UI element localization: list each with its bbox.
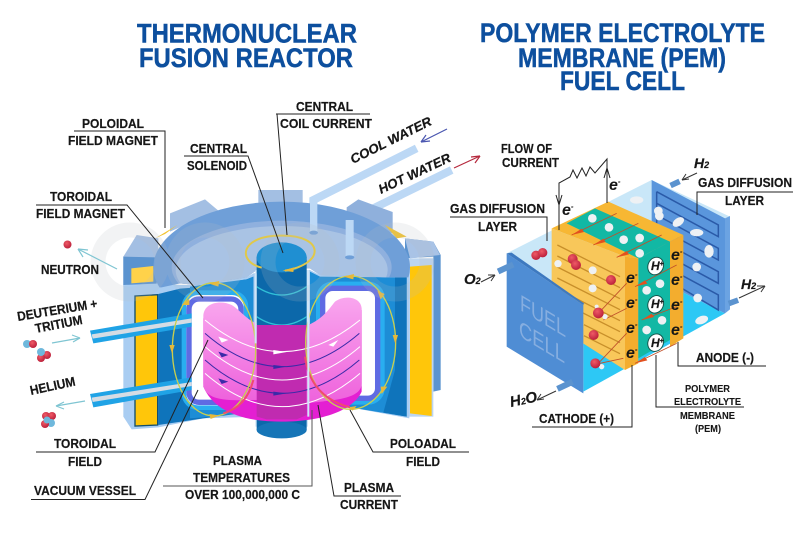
label: toroidal field magnet: TOROIDAL xyxy=(50,189,112,204)
cell side: gold cathode xyxy=(625,257,638,370)
lid ring and top surface xyxy=(153,202,410,288)
text: electrons: e xyxy=(609,177,618,194)
label: deuterium + tritium: TRITIUM xyxy=(34,312,84,336)
text: H+ ions: + xyxy=(660,338,664,345)
arrow: cool water in xyxy=(421,129,447,142)
label: left gas diffusion layer xyxy=(450,201,545,234)
text: H+ ions: H xyxy=(651,297,660,311)
label: hot water: HOT WATER xyxy=(376,150,454,197)
label: poloidal field magnet: FIELD MAGNET xyxy=(68,133,158,148)
right outer block xyxy=(405,238,441,417)
label: central solenoid: CENTRAL xyxy=(190,141,247,156)
label: central solenoid: SOLENOID xyxy=(187,158,247,173)
label: central solenoid xyxy=(187,141,247,173)
text: electrons: - xyxy=(635,270,638,279)
label: anode: ANODE (-) xyxy=(696,350,754,365)
cathode front face xyxy=(552,228,625,370)
back plate: gas diffusion layer xyxy=(652,179,739,313)
title: thermonuclear fusion reactor: THERMONUCLEAR xyxy=(137,18,357,48)
cell side: membrane xyxy=(638,242,670,358)
text: H+ ions: + xyxy=(660,261,664,268)
label: deuterium + tritium xyxy=(16,296,99,336)
label: polymer electrolyte membrane: MEMBRANE xyxy=(680,410,735,422)
text: H+ ions xyxy=(651,259,664,350)
title: PEM fuel cell xyxy=(480,18,765,96)
label: H2 inlet: H2 xyxy=(694,155,709,171)
text: electrons: e xyxy=(626,295,635,312)
label: plasma temperatures xyxy=(185,453,301,502)
title: PEM fuel cell: FUEL CELL xyxy=(560,66,685,96)
label: flow of current: FLOW OF xyxy=(501,141,552,156)
fuel cell diagram xyxy=(497,179,739,393)
label: right gas diffusion layer: LAYER xyxy=(725,193,765,208)
back tabs of outer shell xyxy=(155,190,407,238)
label: polymer electrolyte membrane: (PEM) xyxy=(695,423,721,435)
label: poloadal field xyxy=(390,436,456,469)
port pipes xyxy=(90,313,192,407)
poloidal loop arrowheads xyxy=(169,274,398,419)
top translucent layer xyxy=(507,180,730,305)
label: neutron: NEUTRON xyxy=(41,262,99,277)
watermark rings xyxy=(98,230,617,294)
text: fuel cell plate: FUEL xyxy=(520,290,566,343)
label: toroidal field magnet xyxy=(36,189,125,221)
winding arrowheads xyxy=(218,337,338,396)
leader lines: fuel cell xyxy=(450,192,793,427)
membrane teal top xyxy=(567,208,670,258)
label: plasma current: CURRENT xyxy=(340,497,398,512)
text: electrons: e xyxy=(671,272,680,289)
arrow: H2 outlet xyxy=(739,286,765,298)
vacuum vessel right inner xyxy=(323,288,378,398)
label: helium: HELIUM xyxy=(29,374,77,398)
text: electrons: - xyxy=(635,345,638,354)
title: thermonuclear fusion reactor xyxy=(137,18,357,73)
text: electrons: - xyxy=(635,320,638,329)
poloidal field loops xyxy=(172,276,396,416)
label: plasma temperatures: PLASMA xyxy=(213,453,263,468)
text: electrons: e xyxy=(626,320,635,337)
text: electrons: - xyxy=(618,177,621,186)
floor xyxy=(583,277,725,392)
lower body section xyxy=(123,270,409,429)
particle: neutron xyxy=(64,240,72,248)
label: vacuum vessel: VACUUM VESSEL xyxy=(34,483,136,498)
left outer block xyxy=(123,235,158,287)
label: right gas diffusion layer: GAS DIFFUSION xyxy=(698,175,792,190)
label: plasma temperatures: TEMPERATURES xyxy=(193,470,290,485)
text: electrons: - xyxy=(635,295,638,304)
title: PEM fuel cell: MEMBRANE (PEM) xyxy=(518,43,726,73)
vacuum vessel right xyxy=(318,284,382,402)
label: H2O outlet: H2O xyxy=(508,388,539,411)
label: cool water: COOL WATER xyxy=(348,113,435,167)
vertical pipe ends on lid xyxy=(309,200,354,259)
label: O2 inlet: O2 xyxy=(464,271,481,288)
vacuum vessel left xyxy=(184,293,246,408)
text: electrons: e xyxy=(626,270,635,287)
label: toroidal field: FIELD xyxy=(68,454,102,469)
arrow: H2O outlet xyxy=(537,391,556,400)
cell side: gold anode xyxy=(670,235,683,347)
cooling water pipes xyxy=(313,148,452,257)
front plate: fuel cell xyxy=(497,253,584,393)
label: central coil current xyxy=(280,99,372,131)
label: poloidal field magnet xyxy=(68,116,158,148)
text: electrons: - xyxy=(680,297,683,306)
central coil current ring xyxy=(246,236,315,272)
text: electrons: - xyxy=(680,247,683,256)
text: electrons xyxy=(562,177,683,362)
reactor cutaway diagram xyxy=(90,148,452,438)
arrow: fuel injection xyxy=(52,335,80,343)
arrow: helium exit xyxy=(56,401,85,409)
cathode gold top xyxy=(552,202,683,258)
text: electrons: e xyxy=(671,247,680,264)
label: central coil current: COIL CURRENT xyxy=(280,116,372,131)
label: H2 outlet: H2 xyxy=(741,276,756,292)
label: toroidal field: TOROIDAL xyxy=(54,436,116,451)
title: thermonuclear fusion reactor: FUSION REACTOR xyxy=(139,43,353,73)
arrow: neutron path xyxy=(78,249,117,269)
toroidal field windings xyxy=(205,320,360,407)
label: cathode: CATHODE (+) xyxy=(539,411,614,426)
text: electrons: e xyxy=(626,345,635,362)
particles: helium xyxy=(41,412,56,428)
text: fuel cell plate: CELL xyxy=(519,316,565,369)
arrow: hot water out xyxy=(454,156,480,168)
label: left gas diffusion layer: GAS DIFFUSION xyxy=(450,201,545,216)
text: fuel cell plate xyxy=(519,290,566,369)
label: polymer electrolyte membrane: ELECTROLYTE xyxy=(674,396,741,408)
arrow: O2 inlet xyxy=(481,275,495,282)
central solenoid column xyxy=(255,242,308,438)
text: electrons: e xyxy=(671,322,680,339)
text: electrons: - xyxy=(680,322,683,331)
H+ ions xyxy=(645,255,666,354)
label: deuterium + tritium: DEUTERIUM + xyxy=(16,296,99,324)
label: plasma current: PLASMA xyxy=(344,480,395,495)
label: poloadal field: FIELD xyxy=(406,454,440,469)
label: right gas diffusion layer xyxy=(698,175,792,208)
electron arrowheads xyxy=(572,229,654,363)
label: central coil current: CENTRAL xyxy=(296,99,353,114)
label: plasma current xyxy=(340,480,398,512)
electron flow arrows xyxy=(572,213,677,363)
hydrogen particles xyxy=(554,196,714,369)
text: electrons: e xyxy=(671,297,680,314)
front light strips xyxy=(255,270,309,417)
label: left gas diffusion layer: LAYER xyxy=(478,219,518,234)
text: electrons: - xyxy=(571,202,574,211)
text: H+ ions: H xyxy=(651,259,660,273)
label: toroidal field magnet: FIELD MAGNET xyxy=(36,206,125,221)
plasma torus xyxy=(203,298,362,422)
circuit: flow of current with resistor xyxy=(556,159,610,230)
label: flow of current: CURRENT xyxy=(502,155,559,170)
particles: deuterium and tritium xyxy=(23,340,51,362)
oxygen particles xyxy=(531,248,616,368)
arrow: H2 inlet xyxy=(682,173,697,180)
label: flow of current xyxy=(501,141,559,170)
label: toroidal field xyxy=(54,436,116,469)
plasma current red arcs xyxy=(223,357,350,413)
vacuum vessel left inner xyxy=(189,299,241,402)
label: poloadal field: POLOADAL xyxy=(390,436,456,451)
label: poloidal field magnet: POLOIDAL xyxy=(82,116,144,131)
text: electrons: e xyxy=(562,202,571,219)
label: plasma temperatures: OVER 100,000,000 C xyxy=(185,487,301,502)
label: polymer electrolyte membrane: POLYMER xyxy=(685,383,730,395)
label: polymer electrolyte membrane xyxy=(674,383,741,435)
text: H+ ions: H xyxy=(651,336,660,350)
text: H+ ions: + xyxy=(660,299,664,306)
text: electrons: - xyxy=(680,272,683,281)
leader lines: reactor xyxy=(31,114,469,500)
